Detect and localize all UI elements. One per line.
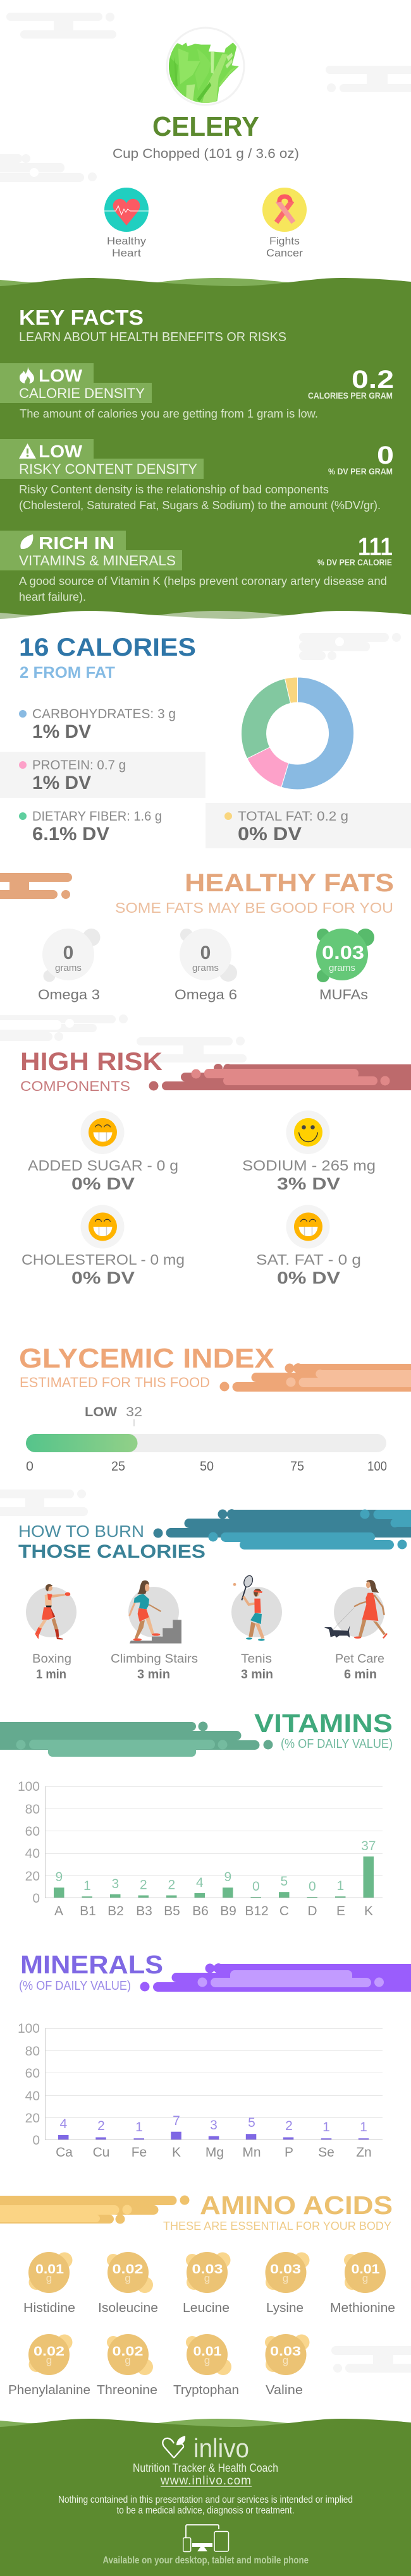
vitamins bar chart: 80 xyxy=(25,1802,40,1817)
burn heading: HOW TO BURN xyxy=(18,1522,144,1541)
vitamins bar chart: 1 xyxy=(83,1879,91,1893)
healthy fats subheading: SOME FATS MAY BE GOOD FOR YOU xyxy=(115,900,393,916)
mufas xyxy=(316,929,374,1002)
vitamins bar chart: B6 xyxy=(192,1904,209,1918)
activity labels: 3 min xyxy=(241,1668,273,1682)
fact: rich in vitamins and minerals: A good source of Vitamin K (helps prevent coronary artery disease and xyxy=(19,575,387,587)
panel: amino acids xyxy=(0,2191,395,2397)
vitamins bar chart: B2 xyxy=(107,1904,124,1918)
minerals bar chart: 7 xyxy=(173,2114,180,2128)
minerals bar chart: Mn xyxy=(242,2145,261,2160)
cholesterol: CHOLESTEROL - 0 mg xyxy=(21,1251,185,1268)
sodium: SODIUM - 265 mg xyxy=(242,1157,376,1174)
saturated fat: SAT. FAT - 0 g xyxy=(256,1251,361,1268)
website link: www.inlivo.com xyxy=(160,2474,251,2488)
fact: low risky content density xyxy=(0,439,394,512)
isoleucine: Isoleucine xyxy=(98,2301,158,2315)
histidine: Histidine xyxy=(23,2301,75,2315)
methionine: g xyxy=(362,2272,368,2284)
glycemic decoration xyxy=(220,1363,411,1392)
glycemic value label: LOW xyxy=(85,1405,117,1419)
vitamins bar chart: 37 xyxy=(361,1839,376,1853)
valine: 0.03 xyxy=(270,2344,301,2359)
high risk decoration xyxy=(149,1064,411,1090)
vitamins bar chart: 2 xyxy=(168,1877,175,1893)
key facts subheading: LEARN ABOUT HEALTH BENEFITS OR RISKS xyxy=(19,330,286,344)
threonine: 0.02 xyxy=(113,2344,143,2359)
donut chart xyxy=(242,677,354,790)
disclaimer: Nothing contained in this presentation and our services is intended or implied xyxy=(58,2495,353,2505)
benefit: fights cancer xyxy=(262,188,307,259)
activity labels xyxy=(32,1652,384,1682)
vitamins bar chart: 5 xyxy=(280,1874,288,1889)
minerals heading: MINERALS xyxy=(20,1950,163,1979)
healthy fats heading: HEALTHY FATS xyxy=(185,869,394,897)
fact: rich in vitamins and minerals: VITAMINS & MINERALS xyxy=(19,553,176,569)
disclaimer xyxy=(58,2495,353,2516)
vitamins bar chart: 0 xyxy=(252,1879,260,1894)
leucine: g xyxy=(204,2272,210,2284)
glycemic scale: 0 xyxy=(26,1459,34,1474)
threonine: g xyxy=(125,2354,131,2366)
fact: low calorie density: The amount of calories you are getting from 1 gram is low. xyxy=(20,407,318,420)
panel: how to burn those calories xyxy=(18,1509,411,1682)
saturated fat xyxy=(256,1205,361,1287)
vitamins bar chart: A xyxy=(54,1904,63,1918)
panel: minerals xyxy=(18,1950,411,2160)
legend: protein: 1% DV xyxy=(32,773,91,793)
valine: Valine xyxy=(266,2383,303,2397)
panel: glycemic index xyxy=(19,1343,411,1474)
vitamins bar chart: 1 xyxy=(336,1879,344,1893)
cholesterol: 0% DV xyxy=(71,1268,135,1287)
key facts heading: KEY FACTS xyxy=(19,306,144,329)
legend: total fat: TOTAL FAT: 0.2 g xyxy=(238,809,348,824)
minerals bar chart: Cu xyxy=(93,2145,109,2160)
omega 6 xyxy=(175,929,237,1002)
minerals bar chart: K xyxy=(172,2145,181,2160)
amino heading: AMINO ACIDS xyxy=(200,2191,393,2220)
sodium: 3% DV xyxy=(277,1174,340,1193)
fact: low risky content density: LOW xyxy=(39,442,83,461)
burn heading: THOSE CALORIES xyxy=(18,1541,206,1562)
glycemic scale: 100 xyxy=(367,1459,387,1474)
fact: low calorie density: 0.2 xyxy=(352,366,394,394)
panel: vitamins xyxy=(0,1709,393,1918)
fact: low calorie density xyxy=(0,363,394,420)
fact: rich in vitamins and minerals xyxy=(0,531,393,603)
header: celery photo xyxy=(167,28,244,106)
glycemic subheading: ESTIMATED FOR THIS FOOD xyxy=(20,1375,210,1390)
phenylalanine xyxy=(8,2334,90,2397)
minerals bar chart: 40 xyxy=(25,2089,40,2104)
minerals bar chart: 20 xyxy=(25,2111,40,2126)
fact: rich in vitamins and minerals: heart failure). xyxy=(19,591,86,603)
inlivo logo xyxy=(163,2433,249,2463)
mufas: grams xyxy=(329,963,355,973)
benefit: fights cancer: Fights xyxy=(269,235,300,247)
minerals bar chart: 4 xyxy=(59,2117,67,2131)
legend: dietary fiber xyxy=(19,809,162,845)
legend: carbohydrates: CARBOHYDRATES: 3 g xyxy=(32,707,176,721)
minerals bar chart: 1 xyxy=(360,2120,367,2134)
legend: total fat xyxy=(206,803,411,848)
glycemic scale: 25 xyxy=(111,1459,125,1474)
benefit: healthy heart: Heart xyxy=(112,247,141,259)
inlivo logo: inlivo xyxy=(193,2433,249,2463)
minerals bar chart: 100 xyxy=(18,2021,40,2036)
tryptophan: g xyxy=(204,2354,210,2366)
saturated fat: 0% DV xyxy=(277,1268,340,1287)
fact: low risky content density: RISKY CONTENT DENSITY xyxy=(19,461,197,477)
phenylalanine: 0.02 xyxy=(34,2344,64,2359)
amino subheading: THESE ARE ESSENTIAL FOR YOUR BODY xyxy=(163,2220,391,2232)
vitamins bar chart: 2 xyxy=(140,1877,147,1893)
threonine: Threonine xyxy=(97,2383,157,2397)
activity: boxing xyxy=(26,1584,77,1640)
leucine xyxy=(183,2252,230,2315)
glycemic value label: 32 xyxy=(126,1405,142,1419)
benefit: healthy heart xyxy=(104,188,149,259)
minerals bar chart: 80 xyxy=(25,2044,40,2059)
high risk heading: HIGH RISK xyxy=(20,1048,163,1076)
minerals decoration xyxy=(140,1963,411,1992)
activity labels: 1 min xyxy=(36,1668,66,1682)
vitamins bar chart: 0 xyxy=(309,1879,316,1894)
minerals bar chart: Ca xyxy=(56,2145,73,2160)
activity: climbing stairs xyxy=(128,1580,181,1644)
activity labels: Pet Care xyxy=(335,1652,384,1666)
minerals bar chart: P xyxy=(285,2145,293,2160)
vitamins bar chart xyxy=(18,1779,383,1918)
glycemic value label xyxy=(85,1405,142,1426)
minerals bar chart: 2 xyxy=(285,2119,293,2133)
activity labels: Tenis xyxy=(241,1652,272,1666)
valine xyxy=(265,2334,310,2397)
fact: rich in vitamins and minerals: RICH IN xyxy=(39,533,114,553)
vitamins bar chart: 60 xyxy=(25,1824,40,1839)
vitamins bar chart: K xyxy=(364,1904,373,1918)
minerals bar chart: 1 xyxy=(322,2120,330,2134)
activity labels: 3 min xyxy=(137,1668,170,1682)
vitamins bar chart: B3 xyxy=(136,1904,152,1918)
high risk subheading: COMPONENTS xyxy=(20,1078,130,1094)
omega 3: Omega 3 xyxy=(38,987,100,1002)
isoleucine: 0.02 xyxy=(113,2262,143,2277)
vitamins bar chart: B12 xyxy=(245,1904,269,1918)
added sugar: 0% DV xyxy=(71,1174,135,1193)
minerals bar chart: 0 xyxy=(32,2133,40,2148)
added sugar xyxy=(28,1110,178,1193)
minerals bar chart: Zn xyxy=(356,2145,372,2160)
glycemic scale: 50 xyxy=(200,1459,214,1474)
benefit: fights cancer: Cancer xyxy=(266,247,303,259)
omega 3: grams xyxy=(55,963,82,973)
activity labels: 6 min xyxy=(344,1668,377,1682)
vitamins bar chart: B5 xyxy=(164,1904,180,1918)
activity labels: Climbing Stairs xyxy=(111,1652,198,1666)
vitamins bar chart: 0 xyxy=(32,1891,40,1906)
threonine xyxy=(97,2334,157,2397)
leucine: 0.03 xyxy=(192,2262,223,2277)
benefit: healthy heart: Healthy xyxy=(107,235,147,247)
minerals bar chart: Se xyxy=(318,2145,334,2160)
mufas: MUFAs xyxy=(319,987,368,1002)
fact: low risky content density: (Cholesterol, Saturated Fat, Sugars & Sodium) to the amount (%DV/gr). xyxy=(19,499,381,512)
tagline: Nutrition Tracker & Health Coach xyxy=(133,2462,278,2474)
vitamins bar chart: 3 xyxy=(111,1877,119,1891)
lysine: 0.03 xyxy=(270,2262,301,2277)
histidine xyxy=(23,2252,75,2315)
minerals bar chart xyxy=(18,2021,383,2160)
minerals bar chart: Mg xyxy=(206,2145,224,2160)
vitamins bar chart: B1 xyxy=(80,1904,96,1918)
vitamins bar chart: 4 xyxy=(196,1875,204,1890)
availability note: Available on your desktop, tablet and mobile phone xyxy=(102,2555,309,2566)
minerals bar chart: 60 xyxy=(25,2066,40,2081)
lysine xyxy=(266,2252,310,2315)
serving size subtitle: Cup Chopped (101 g / 3.6 oz) xyxy=(113,147,299,161)
added sugar: ADDED SUGAR - 0 g xyxy=(28,1157,178,1174)
valine: g xyxy=(283,2354,288,2366)
minerals bar chart: 1 xyxy=(135,2120,143,2134)
panel: healthy fats xyxy=(0,869,394,1002)
phenylalanine: g xyxy=(46,2354,52,2366)
minerals bar chart: 2 xyxy=(97,2119,105,2133)
healthy fats decoration xyxy=(0,873,72,899)
histidine: g xyxy=(46,2272,52,2284)
panel: footer xyxy=(0,2419,411,2576)
vitamins bar chart: 40 xyxy=(25,1846,40,1861)
activity: pet care xyxy=(324,1580,387,1639)
minerals bar chart: 3 xyxy=(210,2118,218,2133)
methionine xyxy=(330,2252,395,2315)
phenylalanine: Phenylalanine xyxy=(8,2383,90,2397)
methionine: 0.01 xyxy=(352,2262,380,2277)
title: CELERY xyxy=(152,111,259,142)
fact: low calorie density: CALORIES PER GRAM xyxy=(308,390,393,400)
calories heading: 16 CALORIES xyxy=(19,634,196,661)
glycemic scale xyxy=(26,1459,387,1474)
minerals subheading: (% OF DAILY VALUE) xyxy=(19,1979,131,1993)
omega 6: grams xyxy=(192,963,219,973)
leucine: Leucine xyxy=(183,2301,230,2315)
fact: rich in vitamins and minerals: 111 xyxy=(358,533,393,561)
vitamins bar chart: 100 xyxy=(18,1779,40,1794)
vitamins bar chart: E xyxy=(336,1904,345,1918)
histidine: 0.01 xyxy=(35,2262,64,2277)
panel: high risk components xyxy=(20,1048,411,1287)
legend: protein xyxy=(0,752,206,798)
isoleucine xyxy=(98,2252,158,2315)
vitamins heading: VITAMINS xyxy=(254,1709,393,1738)
fact: low calorie density: LOW xyxy=(39,366,83,385)
legend: dietary fiber: DIETARY FIBER: 1.6 g xyxy=(32,809,162,824)
vitamins bar chart: 9 xyxy=(55,1870,63,1884)
icon: devices xyxy=(183,2525,229,2552)
mufas: 0.03 xyxy=(322,942,364,963)
vitamins bar chart: C xyxy=(279,1904,289,1918)
tryptophan: Tryptophan xyxy=(173,2383,239,2397)
vitamins bar chart: D xyxy=(307,1904,317,1918)
vitamins bar chart: 20 xyxy=(25,1869,40,1884)
sodium xyxy=(242,1110,376,1193)
legend: carbohydrates xyxy=(19,707,176,742)
fact: low risky content density: 0 xyxy=(377,442,394,469)
glycemic bar xyxy=(26,1434,386,1452)
cholesterol xyxy=(21,1205,185,1287)
calories from fat: 2 FROM FAT xyxy=(20,664,115,682)
burn heading xyxy=(18,1522,206,1562)
fact: rich in vitamins and minerals: % DV PER CALORIE xyxy=(317,557,392,567)
amino decoration xyxy=(0,2196,190,2224)
vitamins bar chart: 9 xyxy=(224,1870,231,1884)
panel: key facts xyxy=(0,278,411,636)
disclaimer: to be a medical advice, diagnosis or treatment. xyxy=(116,2505,295,2516)
legend: dietary fiber: 6.1% DV xyxy=(32,824,109,845)
burn decoration xyxy=(153,1509,411,1550)
legend: carbohydrates: 1% DV xyxy=(32,721,91,742)
fact: low risky content density: % DV PER GRAM xyxy=(328,466,393,476)
methionine: Methionine xyxy=(330,2301,395,2315)
tryptophan: 0.01 xyxy=(193,2344,222,2359)
activity labels: Boxing xyxy=(32,1652,71,1666)
omega 6: 0 xyxy=(200,942,211,963)
tryptophan xyxy=(173,2334,239,2397)
activity: tennis xyxy=(231,1574,282,1641)
lysine: g xyxy=(283,2272,288,2284)
fact: low calorie density: CALORIE DENSITY xyxy=(19,385,145,401)
fact: low risky content density: Risky Content density is the relationship of bad components xyxy=(19,483,329,496)
panel: calories xyxy=(0,634,411,848)
vitamins decoration xyxy=(0,1722,273,1757)
lysine: Lysine xyxy=(266,2301,304,2315)
legend: total fat: 0% DV xyxy=(238,824,302,845)
omega 6: Omega 6 xyxy=(175,987,237,1002)
omega 3 xyxy=(38,929,100,1002)
minerals bar chart: 5 xyxy=(248,2116,255,2130)
vitamins bar chart: B9 xyxy=(220,1904,236,1918)
glycemic scale: 75 xyxy=(290,1459,304,1474)
glycemic heading: GLYCEMIC INDEX xyxy=(19,1343,274,1374)
omega 3: 0 xyxy=(63,942,73,963)
isoleucine: g xyxy=(125,2272,131,2284)
minerals bar chart: Fe xyxy=(132,2145,147,2160)
vitamins subheading: (% OF DAILY VALUE) xyxy=(281,1737,393,1751)
legend: protein: PROTEIN: 0.7 g xyxy=(32,758,126,773)
